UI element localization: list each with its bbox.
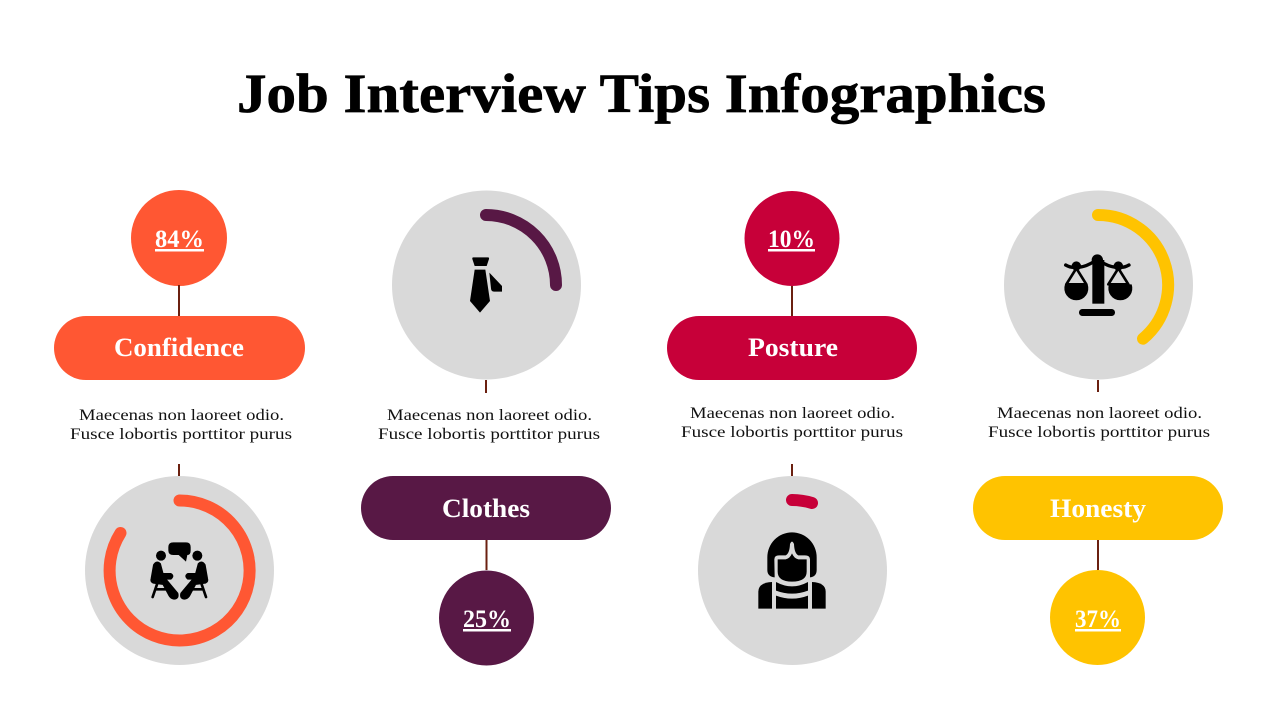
progress ring: 10% xyxy=(698,476,887,665)
percentage badge: 37% xyxy=(1050,570,1145,665)
description text: Maecenas non laoreet odio. xyxy=(997,405,1202,422)
description text: Fusce lobortis porttitor purus xyxy=(681,424,903,441)
description text xyxy=(988,405,1210,441)
description text: Maecenas non laoreet odio. xyxy=(690,405,895,422)
label pill: Honesty: Honesty xyxy=(1050,494,1146,523)
percentage badge: 25% xyxy=(439,570,534,666)
description text: Maecenas non laoreet odio. xyxy=(79,407,284,424)
icon: necktie xyxy=(470,257,502,313)
label pill: Clothes: Clothes xyxy=(442,494,530,523)
description text xyxy=(681,405,903,441)
label pill: Confidence: Confidence xyxy=(114,333,244,362)
icon: two people talking xyxy=(151,542,207,599)
label pill: Honesty xyxy=(973,476,1223,540)
description text: Maecenas non laoreet odio. xyxy=(387,407,592,424)
percentage badge: 10%: 10% xyxy=(768,226,815,253)
description text xyxy=(70,407,292,443)
panel: honesty xyxy=(973,190,1223,665)
progress ring: 25% xyxy=(392,190,581,380)
icon: balance scale xyxy=(1064,254,1132,316)
panel: clothes xyxy=(361,190,611,666)
percentage badge: 84%: 84% xyxy=(155,226,204,253)
description text: Fusce lobortis porttitor purus xyxy=(378,426,600,443)
percentage badge: 10% xyxy=(744,191,840,286)
progress ring: 37% xyxy=(1004,190,1193,380)
label pill: Clothes xyxy=(361,476,611,540)
description text: Fusce lobortis porttitor purus xyxy=(988,424,1210,441)
progress ring: 84% xyxy=(85,476,274,665)
icon: person portrait xyxy=(758,532,826,609)
label pill: Posture xyxy=(667,316,917,380)
percentage badge: 37%: 37% xyxy=(1075,606,1121,633)
panel: posture xyxy=(667,191,917,665)
title: Job Interview Tips Infographics xyxy=(237,63,1046,124)
label pill: Confidence xyxy=(54,316,305,380)
label pill: Posture: Posture xyxy=(748,333,838,362)
percentage badge: 84% xyxy=(131,190,227,286)
panel: confidence xyxy=(54,190,305,665)
description text xyxy=(378,407,600,443)
percentage badge: 25%: 25% xyxy=(463,606,511,633)
description text: Fusce lobortis porttitor purus xyxy=(70,426,292,443)
